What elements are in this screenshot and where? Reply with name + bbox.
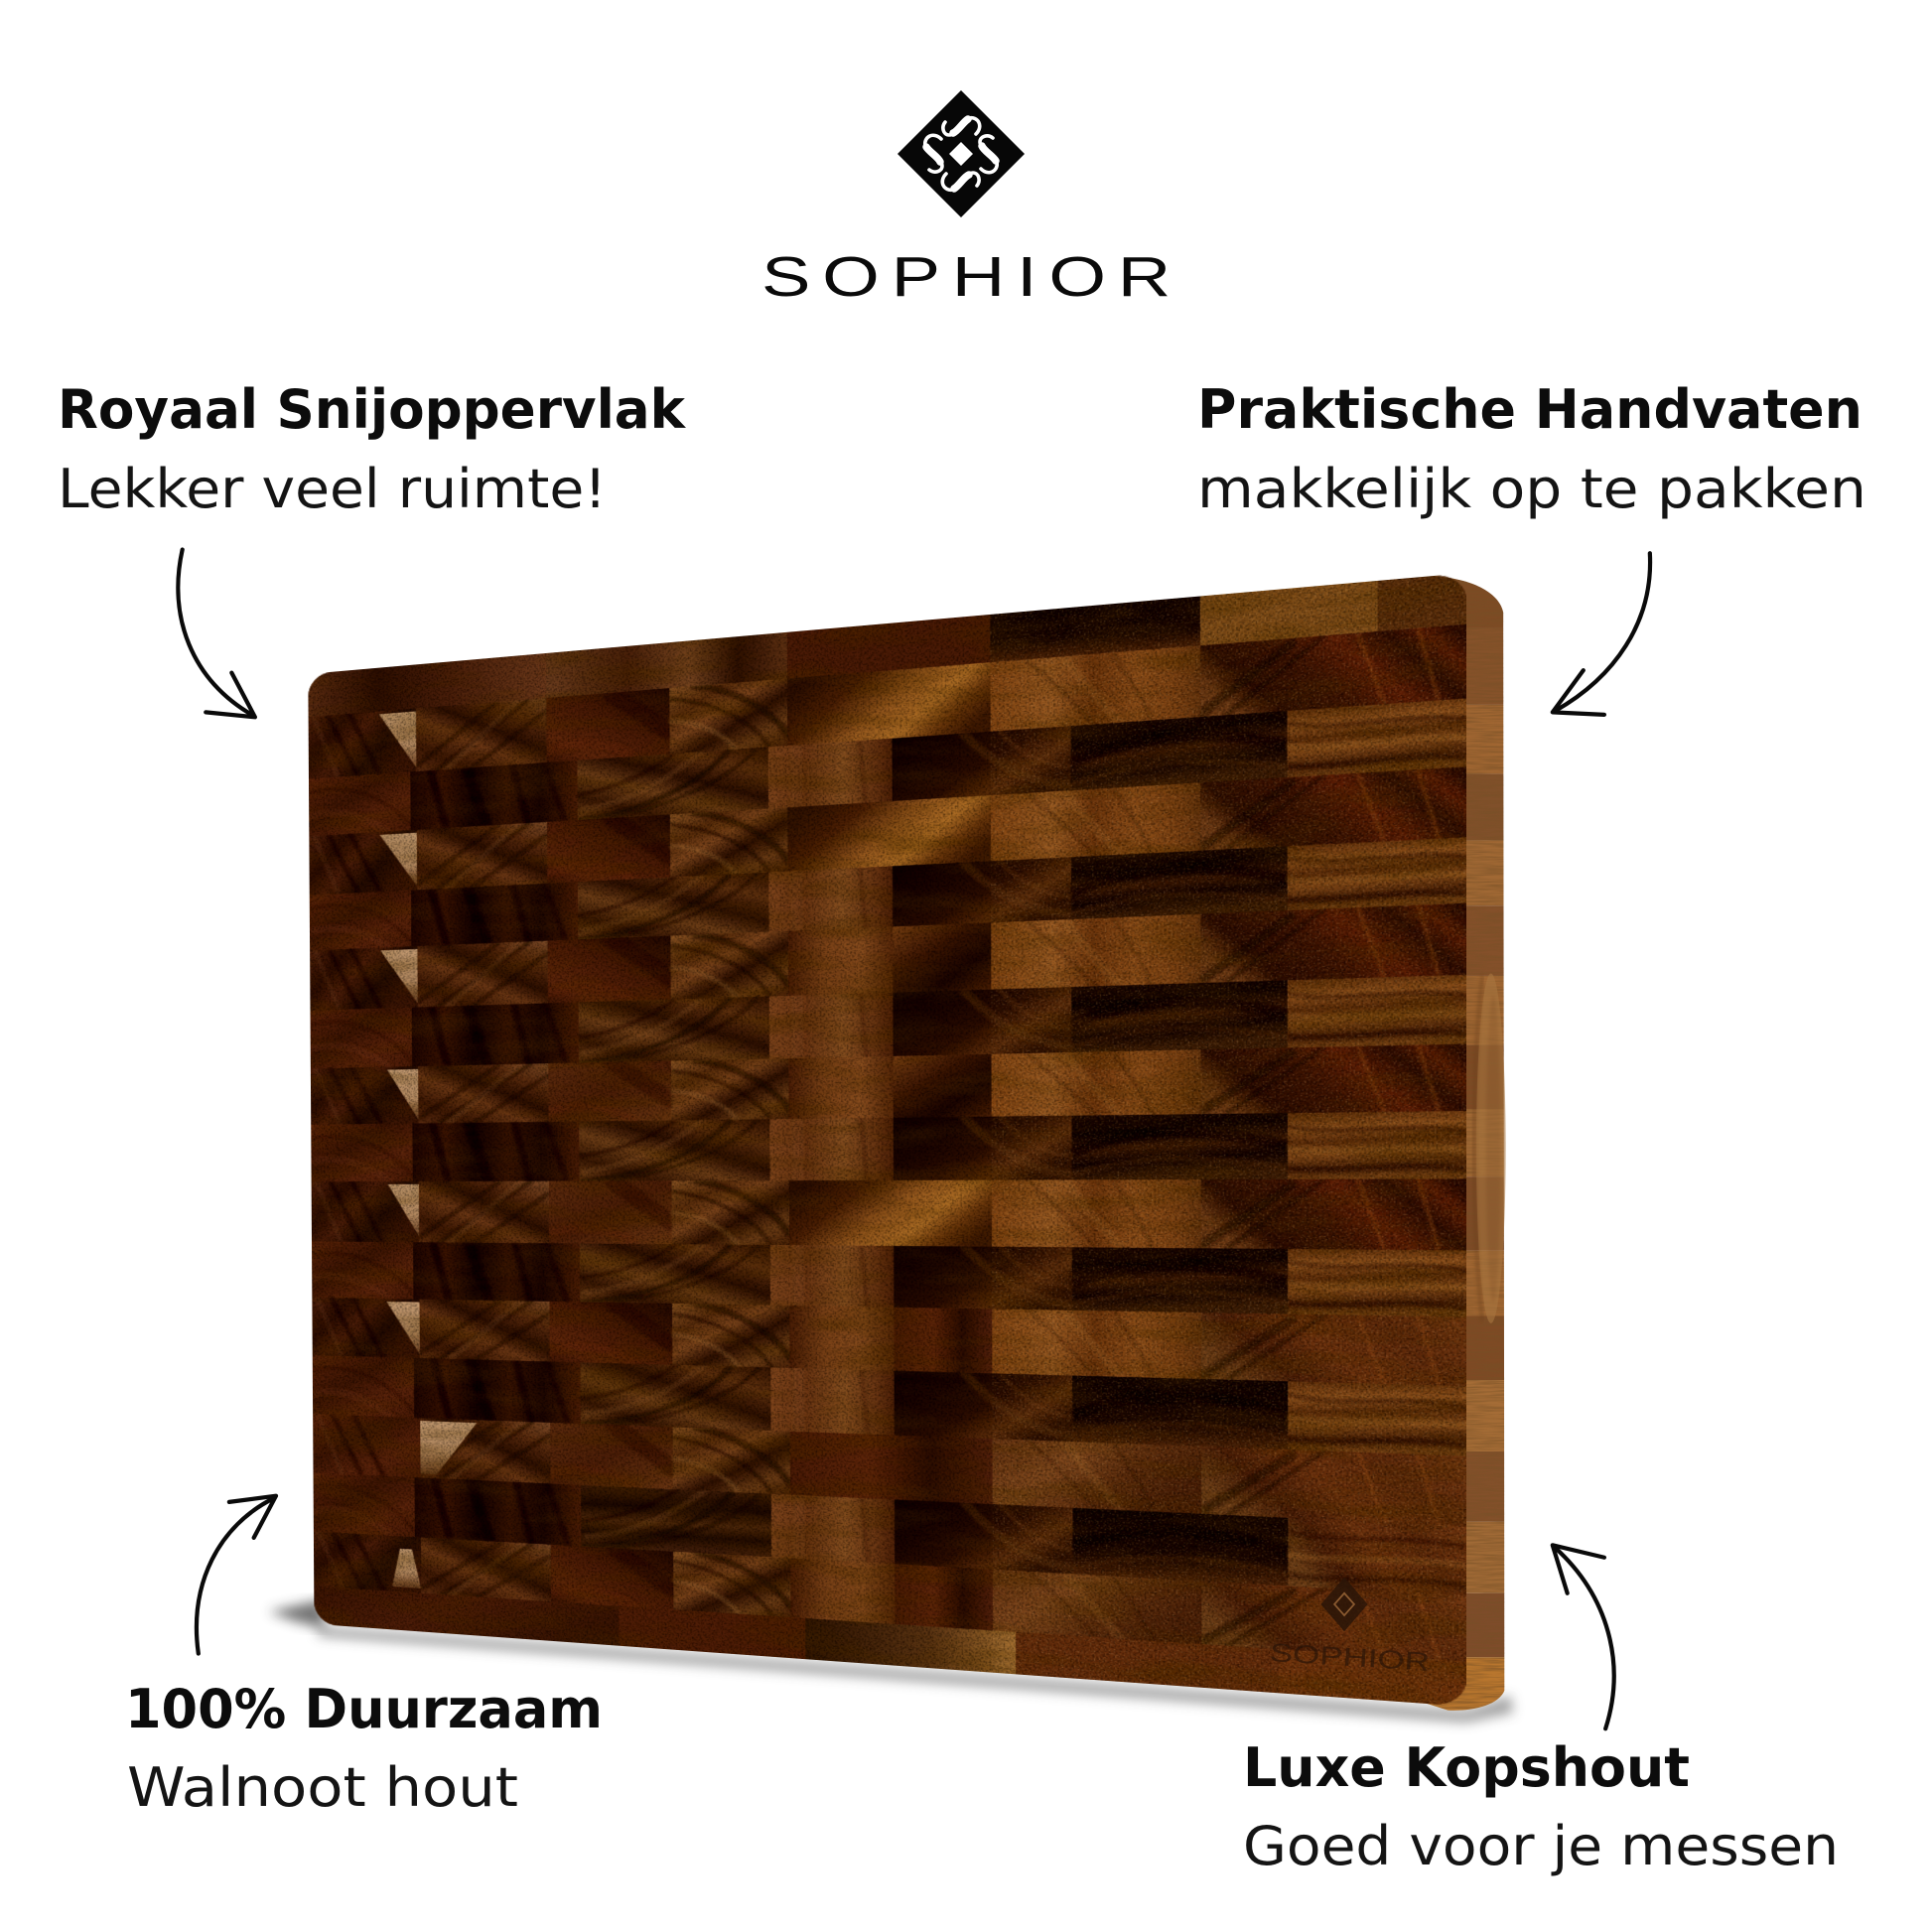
- engraved logo on board: [1269, 1579, 1431, 1677]
- light end-grain triangles: [379, 707, 478, 1592]
- heading: 100% Duurzaam: [125, 1678, 603, 1740]
- subtext: Lekker veel ruimte!: [58, 458, 607, 520]
- speckled pores on the right half: [990, 573, 1466, 1707]
- wordmark: SOPHIOR: [761, 245, 1182, 309]
- wood grain texture overlay: [308, 573, 1466, 1707]
- arrow: top left: [178, 550, 255, 717]
- icon: diamond ornament: [897, 90, 1025, 217]
- top row of blocks: [308, 573, 1466, 717]
- heading: Praktische Handvaten: [1197, 378, 1863, 441]
- callout: Praktische Handvaten: [1197, 378, 1866, 520]
- logo: Sophior: [761, 90, 1182, 309]
- product: end grain cutting board: [266, 575, 1519, 1729]
- subtext: Walnoot hout: [127, 1756, 518, 1819]
- end grain block rows: [309, 624, 1466, 1661]
- callout: Luxe Kopshout: [1243, 1736, 1839, 1877]
- callout: Royaal Snijoppervlak: [58, 378, 686, 520]
- arrow: bottom right: [1553, 1545, 1614, 1728]
- subtext: Goed voor je messen: [1243, 1815, 1839, 1877]
- handle recess: [1474, 973, 1506, 1323]
- heading: Royaal Snijoppervlak: [58, 378, 686, 441]
- wood ring overlays per block: [309, 624, 1466, 1661]
- callout: 100% Duurzaam: [125, 1678, 603, 1819]
- arrow: bottom left: [197, 1496, 276, 1654]
- wood mottling overlay: [308, 573, 1466, 1707]
- subtext: makkelijk op te pakken: [1197, 458, 1866, 520]
- engraved logo on board: SOPHIOR: [1269, 1637, 1431, 1677]
- bottom row of blocks: [314, 1587, 1466, 1707]
- heading: Luxe Kopshout: [1243, 1736, 1690, 1799]
- arrow: top right: [1553, 553, 1650, 715]
- board top face with end grain blocks: [308, 575, 1466, 1705]
- board shadow and side edge: [266, 578, 1519, 1729]
